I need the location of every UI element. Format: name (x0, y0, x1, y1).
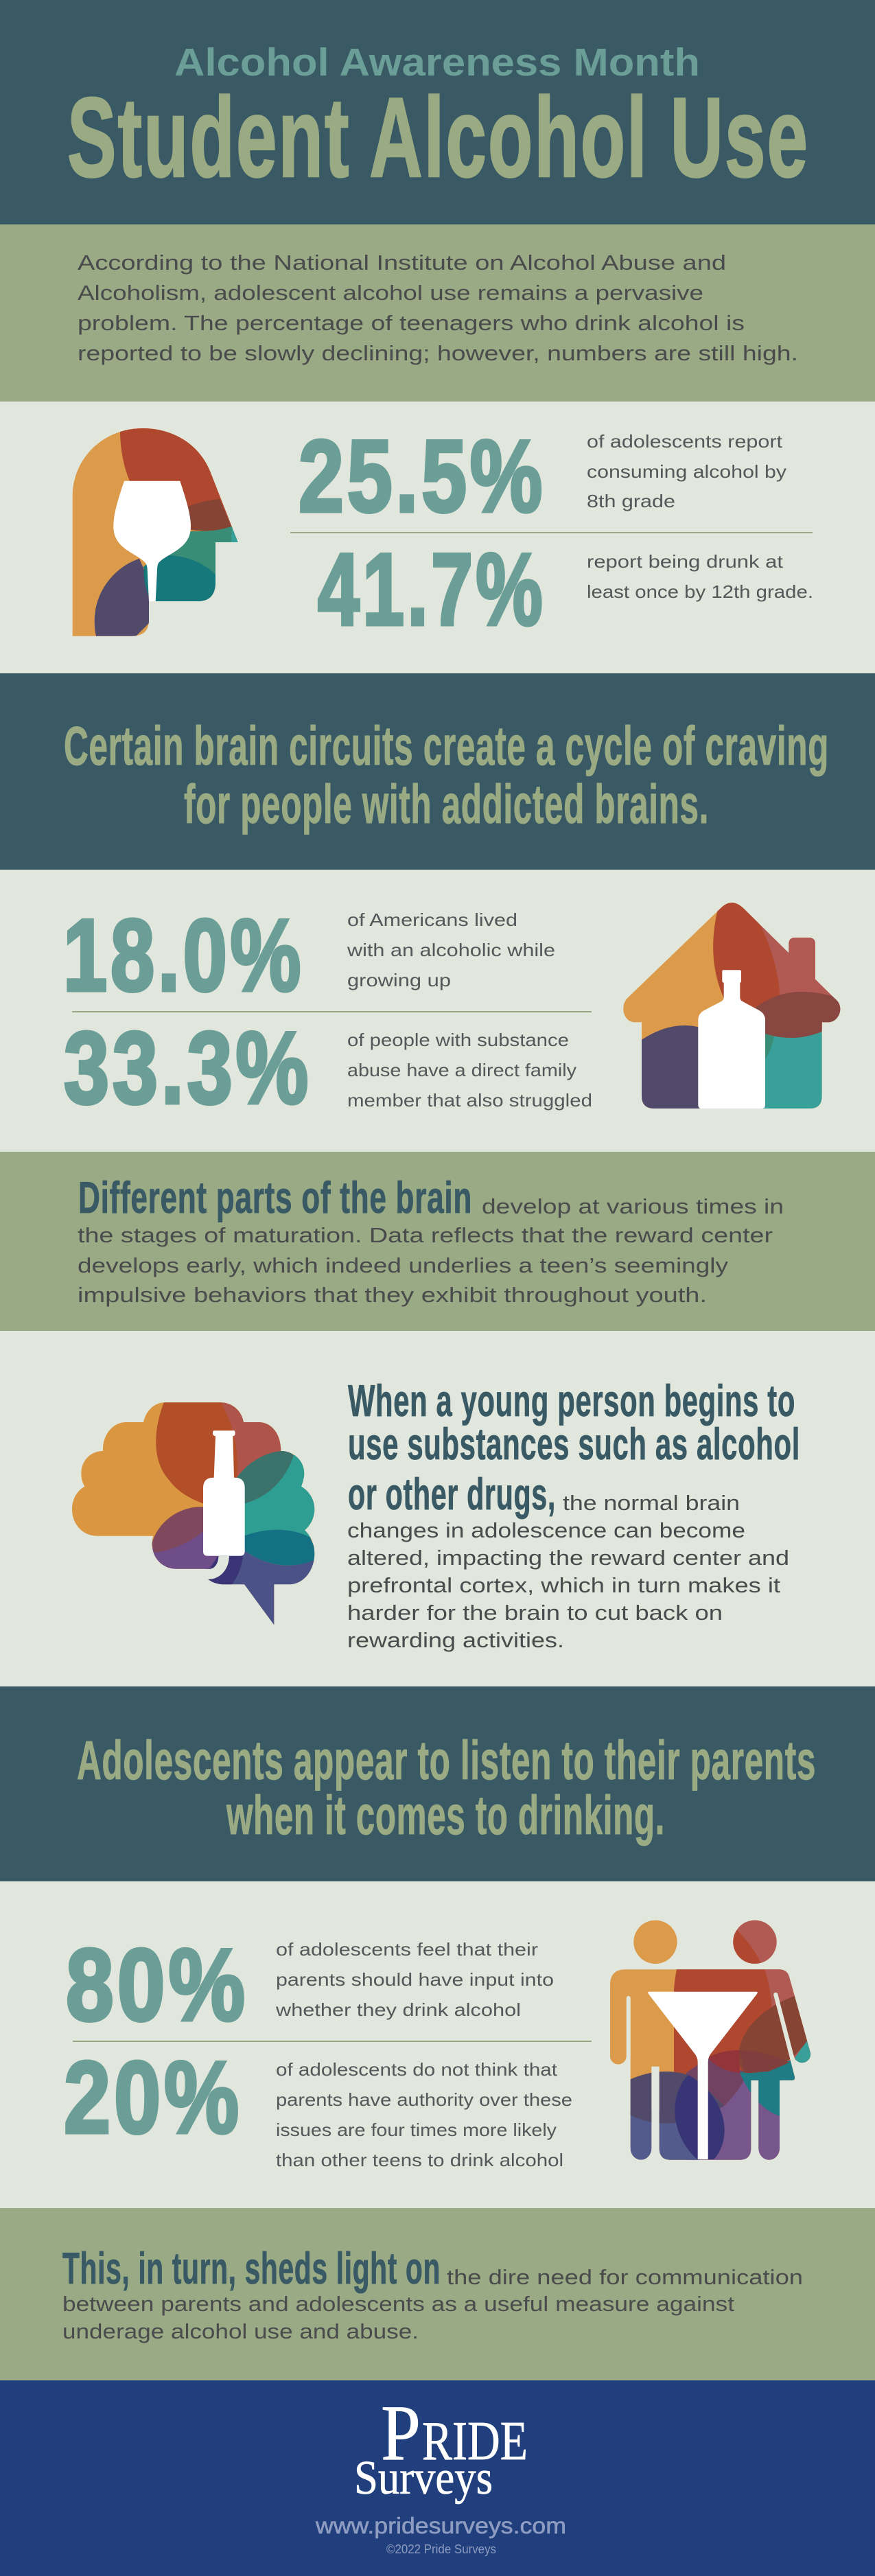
stat: 25.5%: 25.5% (299, 419, 546, 533)
copyright: ©2022 Pride Surveys (386, 2542, 496, 2556)
intro text: reported to be slowly declining; however, numbers are still high. (78, 341, 798, 365)
stat: 33.3%: 33.3% (64, 1010, 312, 1125)
panel: header (0, 0, 875, 224)
lead-in: Different parts of the brain: Different parts of the brain (78, 1172, 472, 1222)
stat: 18.0%: 18.0% (63, 898, 304, 1012)
text: 33.3% description (347, 1030, 592, 1111)
panel: adolescent statistics (73, 428, 813, 636)
text: 41.7% description: report being drunk at (587, 551, 784, 572)
panel: introduction (0, 224, 875, 402)
text: 80% description (275, 1939, 554, 2020)
panel: young person substance use (72, 1384, 798, 1651)
text: 25.5% description: 8th grade (587, 491, 675, 511)
panel: family statistics (65, 903, 840, 1111)
text: brain changes: rewarding activities. (347, 1628, 564, 1652)
logo: Pride Surveys: P (381, 2389, 421, 2476)
panel: footer (0, 2380, 875, 2576)
heading: brain circuits (64, 715, 829, 835)
text: 20% description: issues are four times more likely (276, 2120, 557, 2140)
text: 18.0% description: of Americans lived (347, 909, 517, 930)
text: brain changes: harder for the brain to cut back on (347, 1601, 723, 1625)
text: 33.3% description: of people with substance (347, 1030, 569, 1050)
text: need for communication: underage alcohol use and abuse. (62, 2319, 419, 2343)
panel: listening to parents banner (0, 1686, 875, 1881)
text: brain development (78, 1194, 784, 1307)
text: 33.3% description: member that also struggled (347, 1090, 592, 1111)
text: brain changes: the normal brain (563, 1491, 740, 1515)
text: 20% description: of adolescents do not think that (276, 2059, 558, 2080)
text: brain changes: changes in adolescence can become (347, 1518, 745, 1542)
text: 25.5% description: consuming alcohol by (587, 461, 786, 482)
text: brain development: impulsive behaviors that they exhibit throughout youth. (78, 1283, 707, 1307)
text: 18.0% description: with an alcoholic while (347, 940, 555, 960)
text: brain development: the stages of maturation. Data reflects that the reward center (78, 1223, 773, 1247)
text: need for communication: the dire need for communication (447, 2265, 803, 2289)
text: 80% description: parents should have input into (276, 1969, 554, 1990)
text: 20% description: than other teens to drink alcohol (276, 2150, 563, 2170)
stat: 20%: 20% (64, 2040, 242, 2155)
icon: two people with martini glass (604, 1915, 817, 2162)
text: 80% description: of adolescents feel that their (276, 1939, 538, 1960)
website url: www.pridesurveys.com (315, 2513, 566, 2538)
icon: house with bottle (623, 903, 840, 1109)
panel: parts of the brain (0, 1152, 875, 1331)
text: 25.5% description: of adolescents report (587, 431, 783, 452)
text: brain development: develop at various times in (482, 1194, 784, 1218)
intro text: problem. The percentage of teenagers who drink alcohol is (78, 311, 745, 335)
panel: communication (0, 2208, 875, 2382)
text: 20% description (276, 2059, 572, 2170)
heading: listen to parents (77, 1730, 816, 1846)
text: brain development: develops early, which indeed underlies a teen’s seemingly (78, 1253, 729, 1277)
text: 41.7% description: least once by 12th grade. (587, 581, 813, 602)
icon: brain with bottle (72, 1402, 314, 1625)
panel: parents statistics (65, 1921, 811, 2166)
lead-in: When a young person: or other drugs, (348, 1469, 556, 1519)
text: 33.3% description: abuse have a direct family (347, 1060, 576, 1080)
logo: Pride Surveys: Surveys (354, 2452, 493, 2505)
text: 25.5% description (587, 431, 786, 511)
stat: 41.7%: 41.7% (318, 532, 546, 647)
panel: brain circuits banner (0, 673, 875, 870)
text: brain changes: altered, impacting the reward center and (347, 1546, 789, 1570)
lead-in: This, in turn, sheds light on: This, in turn, sheds light on (62, 2243, 441, 2293)
intro text: According to the National Institute on Alcohol Abuse and (78, 251, 726, 275)
text: brain changes (347, 1491, 789, 1652)
text: 41.7% description (587, 551, 813, 602)
lead-in: When a young person (348, 1376, 800, 1519)
logo: Pride Surveys: RIDE (422, 2411, 528, 2472)
text: 18.0% description (347, 909, 555, 990)
text: brain changes: prefrontal cortex, which in turn makes it (347, 1573, 780, 1597)
text: need for communication: between parents and adolescents as a useful measure against (62, 2292, 734, 2316)
text: 20% description: parents have authority over these (276, 2089, 572, 2110)
intro text: Alcoholism, adolescent alcohol use remains a pervasive (78, 281, 703, 305)
stat: 80%: 80% (66, 1927, 248, 2042)
icon: head with wine glass (73, 428, 238, 636)
text: 18.0% description: growing up (347, 970, 451, 990)
subtitle: Alcohol Awareness Month: Alcohol Awareness Month (174, 40, 700, 84)
logo: Pride Surveys (354, 2389, 528, 2505)
text: need for communication (62, 2265, 803, 2343)
text: 80% description: whether they drink alcohol (275, 1999, 521, 2020)
intro text (78, 251, 798, 365)
